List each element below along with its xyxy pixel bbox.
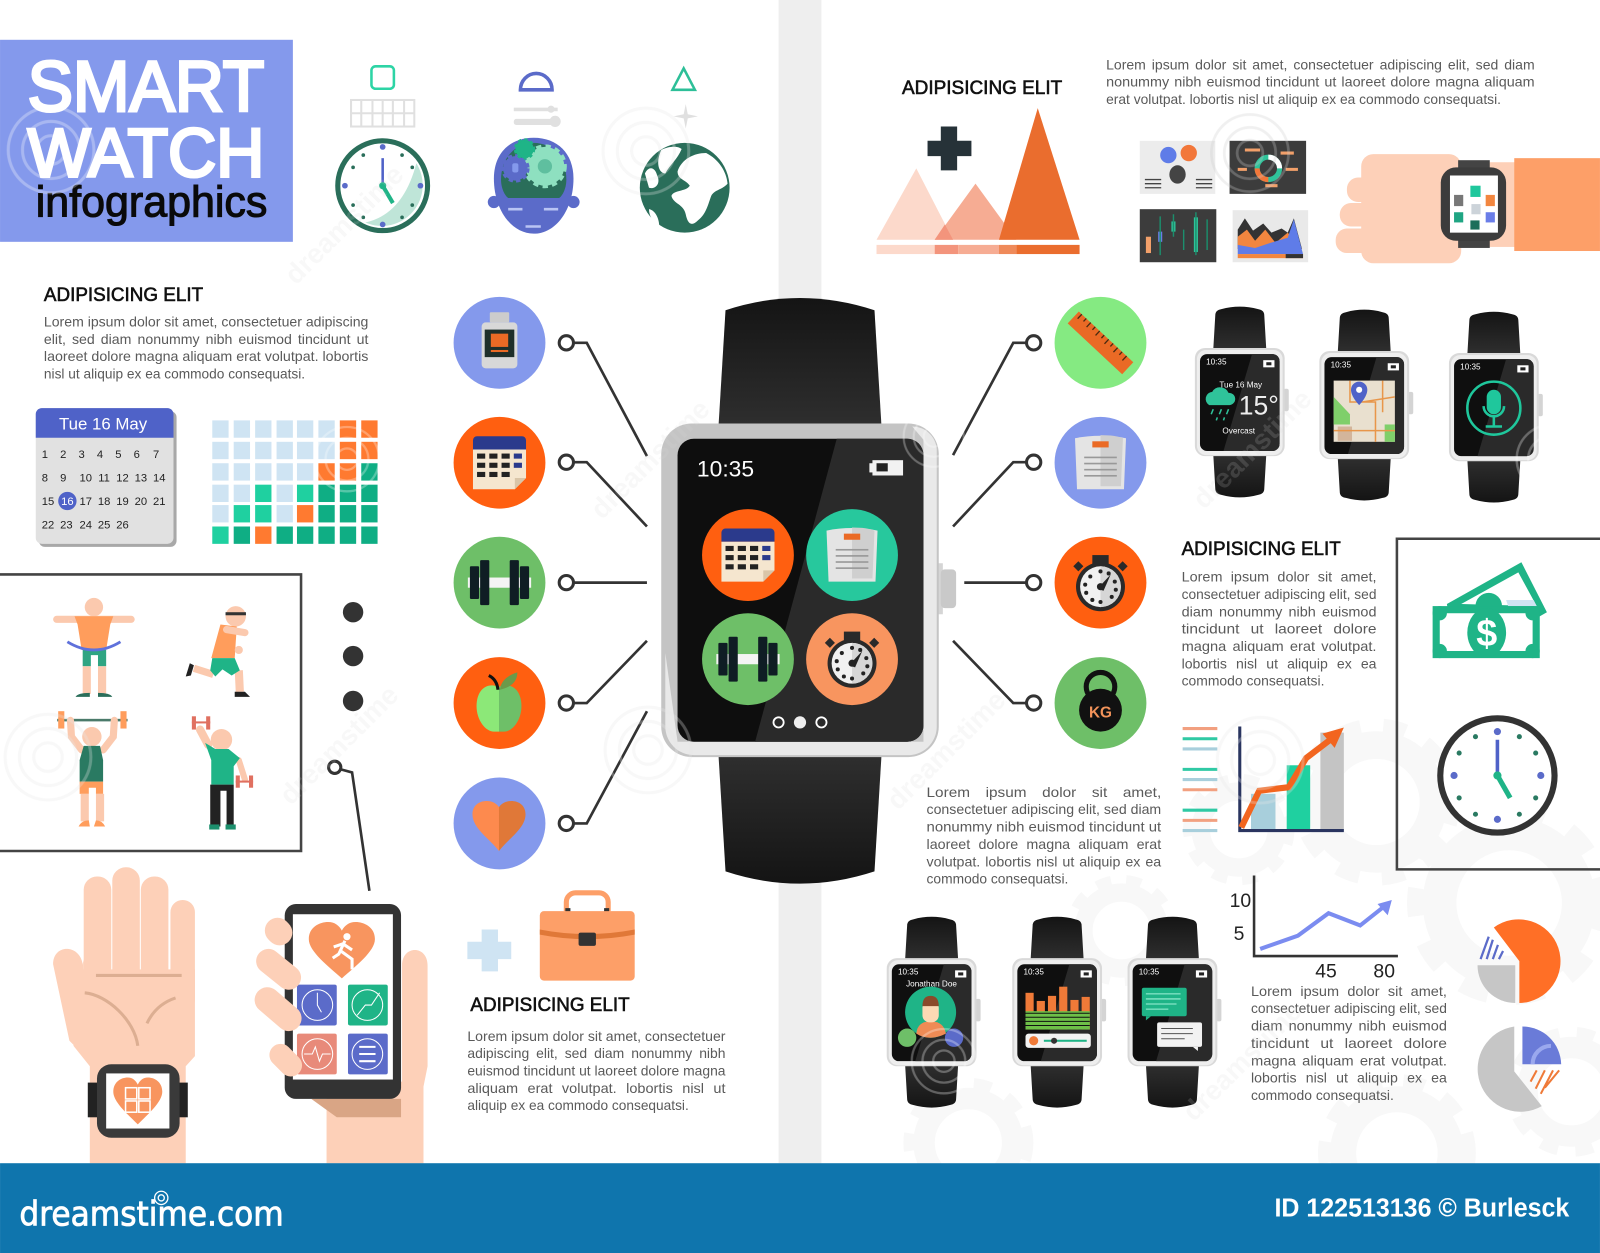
case bbox=[661, 423, 939, 757]
icon: globe bbox=[640, 143, 730, 233]
thumbnail: ring bbox=[1230, 141, 1306, 194]
text block: bottom left: euismod tincidunt ut laoreet dolore magna bbox=[467, 1063, 726, 1078]
wrist watch bbox=[88, 1064, 188, 1138]
icon: faded tools bbox=[514, 106, 560, 127]
icon circle: heart bbox=[454, 778, 545, 869]
small watch: weather bbox=[1195, 307, 1289, 497]
text block: bottom right: Lorem ipsum dolor sit amet, bbox=[1251, 984, 1447, 999]
small watch: map bbox=[1319, 310, 1413, 500]
text block: middle right: commodo consequatsi. bbox=[1182, 674, 1324, 689]
watermark text: dreamstime bbox=[1186, 383, 1318, 514]
text block: middle right: consectetuer adipiscing elit, sed bbox=[1182, 587, 1377, 602]
highlighted day bbox=[58, 492, 77, 510]
text block: bottom right: diam nonummy nibh euismod bbox=[1251, 1019, 1447, 1034]
main smart watch bbox=[661, 298, 956, 884]
panel: money and clock bbox=[1397, 539, 1600, 869]
heatmap chart bbox=[212, 420, 378, 544]
small watch: microphone: 10:35 bbox=[1460, 362, 1481, 371]
footer spiral bbox=[155, 1191, 168, 1205]
calendar numbers: 26 bbox=[116, 520, 129, 532]
pie chart: grey bbox=[1478, 1026, 1561, 1112]
icon: green rounded square bbox=[371, 66, 394, 89]
connectors: left bbox=[559, 336, 647, 831]
calendar numbers: 22 bbox=[42, 520, 54, 532]
text block: left: nisl ut aliquip ex ea commodo consequatsi. bbox=[44, 367, 305, 382]
calendar numbers: 1 bbox=[42, 449, 48, 461]
text block: top right: nonummy nibh euismod tincidunt ut laoreet dolore magna aliquam bbox=[1106, 75, 1535, 90]
icon circle: calendar bbox=[454, 417, 545, 509]
message bubbles bbox=[1142, 988, 1202, 1051]
text block: middle right: Lorem ipsum dolor sit amet, bbox=[1182, 570, 1377, 585]
icon circle: bottle bbox=[454, 297, 545, 389]
watermarks bbox=[5, 107, 1585, 1093]
dollar sign: $ bbox=[1476, 612, 1497, 654]
watermark text: dreamstime bbox=[584, 393, 716, 525]
calendar numbers: 12 bbox=[116, 473, 129, 485]
heading: left: ADIPISICING ELIT bbox=[44, 284, 203, 306]
text block: under main watch: nonummy nibh euismod tincidunt ut bbox=[927, 820, 1161, 835]
axis labels bbox=[1230, 890, 1395, 983]
small watch: weather: Overcast bbox=[1222, 427, 1256, 436]
text block: middle right: lobortis nisl ut aliquip ex ea bbox=[1182, 656, 1377, 671]
icon circle: apple bbox=[454, 657, 545, 749]
heading: middle right: ADIPISICING ELIT bbox=[1182, 538, 1341, 560]
background gears bbox=[911, 729, 1600, 1222]
call buttons bbox=[898, 1029, 916, 1047]
icon: faded keypad bbox=[351, 100, 414, 127]
text block: bottom left bbox=[467, 1029, 726, 1113]
calendar numbers: 25 bbox=[98, 520, 110, 532]
text block: under main watch: Lorem ipsum dolor sit amet, bbox=[927, 785, 1161, 800]
figure: runner bbox=[186, 606, 250, 697]
thumbnail: blobs bbox=[1140, 141, 1215, 194]
small watch: microphone bbox=[1449, 312, 1543, 503]
axis labels: 10 bbox=[1230, 890, 1251, 912]
bottom strap bbox=[718, 753, 882, 884]
heading: bottom left: ADIPISICING ELIT bbox=[470, 994, 630, 1016]
icon: head with gears bbox=[488, 138, 580, 234]
icon: triangle bbox=[672, 68, 695, 90]
footer bar bbox=[0, 1163, 1600, 1253]
calendar numbers: 8 bbox=[42, 473, 48, 485]
palm lines bbox=[85, 975, 182, 1046]
calendar numbers: 3 bbox=[79, 449, 85, 461]
thumbnail: candles bbox=[1140, 209, 1216, 262]
cloud bbox=[1206, 387, 1235, 405]
text block: under main watch: volutpat. lobortis nisl ut aliquip ex ea bbox=[927, 854, 1162, 869]
watermark text: dreamstime bbox=[273, 679, 404, 810]
title: SMART: SMART bbox=[28, 47, 264, 127]
map bbox=[1334, 381, 1395, 442]
figure: hula hoop bbox=[53, 598, 135, 697]
text block: top right: Lorem ipsum dolor sit amet, consectetuer adipiscing elit, sed diam bbox=[1106, 57, 1535, 72]
avatar bbox=[905, 987, 956, 1038]
wrist watch case bbox=[1441, 160, 1506, 248]
top strap bbox=[718, 298, 882, 429]
calendar numbers: 9 bbox=[60, 473, 66, 485]
chart: small line bbox=[1230, 875, 1398, 983]
watermark text bbox=[273, 159, 1318, 1127]
small watch: call bbox=[887, 917, 981, 1108]
hand with smart watch bbox=[1336, 154, 1600, 263]
equalizer bars bbox=[1025, 987, 1090, 1030]
footer credit: ID 122513136 © Burlesck bbox=[1274, 1194, 1570, 1222]
subtitle: infographics bbox=[36, 177, 267, 226]
text block: middle right bbox=[1182, 570, 1377, 689]
mic icon bbox=[1467, 382, 1520, 435]
player bar bbox=[1025, 1034, 1091, 1048]
kettlebell label: KG bbox=[1089, 704, 1112, 721]
app: stopwatch bbox=[806, 613, 898, 705]
app: scale bbox=[806, 509, 898, 601]
pager dots bbox=[773, 716, 827, 729]
figure: weightlifter bbox=[57, 711, 128, 826]
fingers bbox=[267, 931, 291, 1065]
icon: briefcase bbox=[540, 893, 635, 981]
small watch: call: 10:35 bbox=[898, 967, 919, 976]
watermark text: dreamstime bbox=[278, 159, 409, 290]
watermark text: dreamstime bbox=[1176, 995, 1307, 1127]
calendar numbers: 11 bbox=[98, 473, 110, 485]
icon: faded compass bbox=[673, 104, 698, 129]
text block: bottom left: adipiscing elit, sed diam nonummy nibh bbox=[467, 1046, 726, 1061]
text block: bottom right: commodo consequatsi. bbox=[1251, 1088, 1394, 1103]
text block: bottom right: lobortis nisl ut aliquip ex ea bbox=[1251, 1071, 1447, 1086]
text block: bottom right: magna aliquam erat volutpat. bbox=[1251, 1053, 1447, 1068]
text block: top right: erat volutpat. lobortis nisl ut aliquip ex ea commodo consequatsi. bbox=[1106, 92, 1501, 107]
thumbnail: area bbox=[1233, 210, 1308, 262]
small watch: equalizer: 10:35 bbox=[1023, 967, 1044, 976]
chart: growth bars bbox=[1183, 726, 1344, 831]
connectors: right bbox=[953, 336, 1041, 710]
text block: under main watch: consectetuer adipiscing elit, sed diam bbox=[927, 802, 1161, 817]
calendar numbers: 18 bbox=[98, 496, 110, 508]
calendar numbers: 13 bbox=[135, 473, 147, 485]
calendar title: Tue 16 May bbox=[59, 415, 148, 434]
icon: wall clock bbox=[338, 141, 428, 231]
text block: bottom right bbox=[1251, 984, 1447, 1103]
text block: under main watch: commodo consequatsi. bbox=[927, 872, 1068, 887]
small watch: weather: 15° bbox=[1239, 390, 1279, 420]
calendar numbers: 17 bbox=[80, 496, 92, 508]
plus dark bbox=[928, 127, 971, 170]
small watch: chat: 10:35 bbox=[1139, 967, 1160, 976]
panel: fitness figures bbox=[0, 574, 301, 851]
text block: bottom left: aliquip ex ea commodo consequatsi. bbox=[467, 1098, 689, 1113]
axis labels: 5 bbox=[1234, 923, 1244, 945]
icon circle: dumbbell bbox=[454, 537, 545, 629]
calendar numbers: 20 bbox=[135, 496, 147, 508]
calendar bbox=[36, 408, 177, 547]
text block: under main watch: laoreet dolore magna aliquam erat bbox=[927, 837, 1161, 852]
chart: mountains bbox=[877, 108, 1080, 254]
small watch: map: 10:35 bbox=[1331, 360, 1351, 369]
text block: bottom left: Lorem ipsum dolor sit amet, consectetuer bbox=[467, 1029, 726, 1044]
time: 10:35 bbox=[697, 457, 754, 482]
pie chart: orange bbox=[1478, 919, 1560, 1003]
connector: phone bbox=[329, 761, 369, 891]
phone bbox=[285, 904, 401, 1099]
app: dumbbell bbox=[702, 613, 794, 705]
text block: bottom right: tincidunt ut laoreet dolore bbox=[1251, 1036, 1447, 1051]
calendar numbers: 6 bbox=[134, 449, 140, 461]
watermark text: dreamstime bbox=[880, 684, 1011, 815]
text block: under main watch bbox=[927, 785, 1162, 887]
hand with watch bbox=[53, 867, 195, 1163]
calendar numbers: 2 bbox=[60, 449, 66, 461]
icon: half circle bbox=[520, 73, 552, 90]
text block: bottom left: aliquam erat volutpat. lobortis nisl ut bbox=[467, 1081, 726, 1096]
calendar numbers: 16 bbox=[61, 496, 74, 508]
icon: money bbox=[1433, 562, 1547, 658]
battery bbox=[869, 460, 903, 475]
text block: bottom right: consectetuer adipiscing elit, sed bbox=[1251, 1001, 1447, 1016]
icon circle: kettlebell bbox=[1055, 657, 1146, 749]
thumbnails: charts bbox=[1140, 141, 1308, 262]
calendar numbers: 15 bbox=[42, 496, 54, 508]
text block: middle right: diam nonummy nibh euismod bbox=[1182, 604, 1377, 619]
calendar numbers: 10 bbox=[80, 473, 92, 485]
icon: clock bbox=[1440, 718, 1555, 833]
small watch: equalizer bbox=[1012, 917, 1106, 1108]
calendar numbers: 24 bbox=[80, 520, 92, 532]
legend stripes bbox=[1183, 729, 1217, 831]
text block: left: Lorem ipsum dolor sit amet, consectetuer adipiscing bbox=[44, 315, 368, 330]
small watch: weather: 10:35 bbox=[1206, 357, 1227, 366]
figure: dumbbell curls bbox=[192, 716, 253, 830]
app: calendar bbox=[702, 509, 794, 601]
text block: left: elit, sed diam nonummy nibh euismod tincidunt ut bbox=[44, 332, 369, 347]
central grey strip bbox=[779, 0, 821, 1163]
text block: top right bbox=[1106, 57, 1535, 107]
small watch: call: Jonathan Doe bbox=[906, 980, 957, 989]
calendar numbers: 7 bbox=[153, 449, 159, 461]
text block: middle right: magna aliquam erat volutpat. bbox=[1182, 639, 1377, 654]
axis labels: 45 bbox=[1315, 961, 1337, 983]
icon circle: ruler bbox=[1055, 297, 1146, 389]
heart with runner bbox=[309, 922, 375, 978]
icon circle: scale bbox=[1055, 417, 1146, 509]
app tiles bbox=[297, 985, 388, 1074]
calendar numbers: 19 bbox=[116, 496, 129, 508]
crown bbox=[937, 563, 956, 614]
icon: plus light bbox=[467, 930, 511, 971]
calendar numbers bbox=[42, 449, 165, 532]
text block: middle right: tincidunt ut laoreet dolore bbox=[1182, 622, 1377, 637]
icon circle: stopwatch bbox=[1055, 537, 1146, 629]
calendar numbers: 14 bbox=[153, 473, 165, 485]
small watch: weather: Tue 16 May bbox=[1219, 381, 1263, 390]
small watch: chat bbox=[1128, 917, 1221, 1108]
text block: left bbox=[44, 315, 369, 382]
dots bbox=[343, 602, 363, 711]
title: WATCH: WATCH bbox=[28, 116, 264, 192]
calendar numbers: 21 bbox=[153, 496, 165, 508]
footer logo: dreamstime.com bbox=[19, 1194, 284, 1233]
heading: top right: ADIPISICING ELIT bbox=[902, 77, 1062, 99]
calendar numbers: 23 bbox=[60, 520, 73, 532]
screen bbox=[678, 439, 923, 742]
hand with phone bbox=[267, 904, 428, 1163]
calendar numbers: 4 bbox=[97, 449, 103, 461]
axis labels: 80 bbox=[1373, 961, 1395, 983]
title block bbox=[0, 40, 293, 242]
calendar numbers: 5 bbox=[115, 449, 122, 461]
text block: left: laoreet dolore magna aliquam erat volutpat. lobortis bbox=[44, 349, 369, 364]
